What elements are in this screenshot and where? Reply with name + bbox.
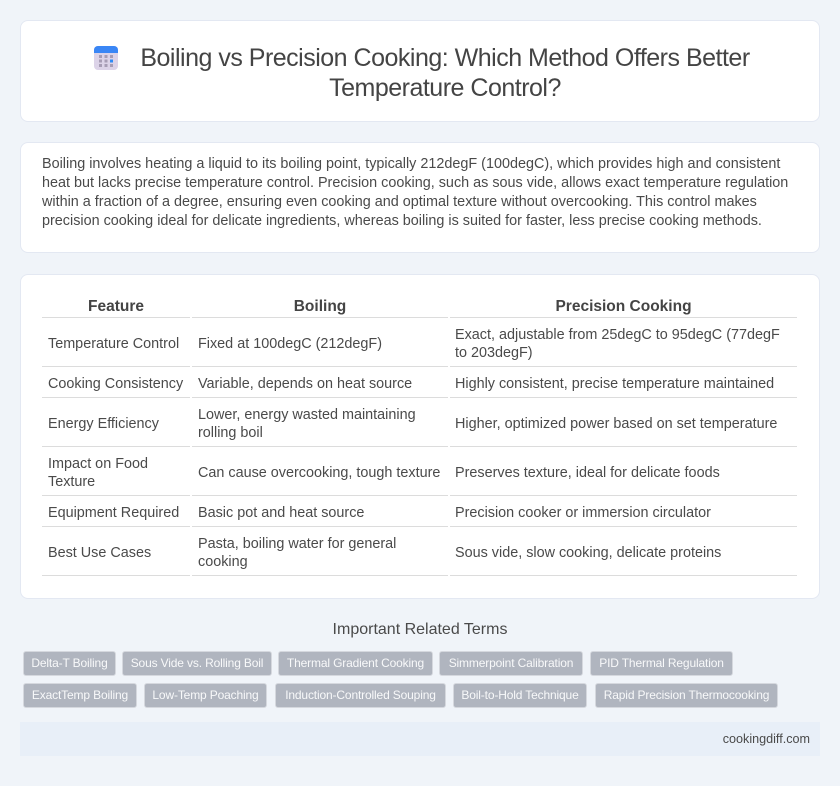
- title: Temperature Control?: [329, 74, 561, 102]
- header: feature: Feature: [88, 298, 144, 315]
- icon: calendar: [94, 46, 118, 70]
- table: comparison: Fixed at 100degC (212degF): [198, 336, 382, 352]
- summary text: precision cooking ideal for delicate ingredients, whereas boiling is suited for faster, less precise cooking methods.: [42, 213, 762, 229]
- tags: related terms: [23, 651, 778, 708]
- table: comparison: cooking: [198, 554, 248, 570]
- table: comparison: Variable, depends on heat source: [198, 376, 412, 392]
- table: comparison: [42, 298, 797, 576]
- row: impact on food texture: [48, 456, 148, 490]
- tags: related terms: ExactTemp Boiling: [32, 688, 128, 702]
- panel: summary: [20, 142, 820, 253]
- table: comparison: Basic pot and heat source: [198, 505, 364, 521]
- tags: related terms: Boil-to-Hold Technique: [461, 688, 579, 702]
- tags: related terms: PID Thermal Regulation: [599, 656, 724, 670]
- tags: related terms: Simmerpoint Calibration: [449, 656, 573, 670]
- table: comparison: Sous vide, slow cooking, delicate proteins: [455, 545, 721, 561]
- table: comparison: Precision cooker or immersion circulator: [455, 505, 711, 521]
- header: boiling: Boiling: [294, 298, 346, 315]
- title: Boiling vs Precision Cooking: Which Method Offers Better: [140, 44, 750, 72]
- row: energy efficiency: Energy Efficiency: [48, 416, 159, 432]
- row: impact on food texture: Impact on Food: [48, 456, 148, 472]
- header: precision cooking: Precision Cooking: [555, 298, 692, 315]
- table: comparison: Pasta, boiling water for general: [198, 536, 396, 552]
- tags: related terms: Rapid Precision Thermocooking: [604, 688, 769, 702]
- table: comparison: Higher, optimized power based on set temperature: [455, 416, 777, 432]
- summary text: heat but lacks precise temperature control. Precision cooking, such as sous vide, allows exact temperature regulation: [42, 175, 788, 191]
- row: impact on food texture: Texture: [48, 474, 95, 490]
- heading: related terms: Important Related Terms: [333, 621, 507, 638]
- tags: related terms: Induction-Controlled Souping: [285, 688, 436, 702]
- footer text: cookingdiff.com: [723, 732, 810, 746]
- table: comparison: rolling boil: [198, 425, 263, 441]
- panel: title card: [20, 20, 820, 122]
- summary text: Boiling involves heating a liquid to its boiling point, typically 212degF (100degC), which provides high and consistent: [42, 156, 780, 172]
- row: equipment required: Equipment Required: [48, 505, 179, 521]
- row: cooking consistency: Cooking Consistency: [48, 376, 183, 392]
- table: comparison: Can cause overcooking, tough texture: [198, 465, 440, 481]
- table: comparison: Highly consistent, precise temperature maintained: [455, 376, 774, 392]
- table: comparison: to 203degF): [455, 345, 533, 361]
- summary text: within a fraction of a degree, ensuring even cooking and optimal texture without overcooking. This control makes: [42, 194, 757, 210]
- row: temperature control: Temperature Control: [48, 336, 179, 352]
- tags: related terms: Sous Vide vs. Rolling Boil: [131, 656, 263, 670]
- tags: related terms: Low-Temp Poaching: [152, 688, 259, 702]
- table: comparison: Lower, energy wasted maintaining: [198, 407, 416, 423]
- footer: [20, 722, 820, 756]
- row: best use cases: Best Use Cases: [48, 545, 151, 561]
- title: [140, 44, 750, 102]
- table: comparison: Exact, adjustable from 25degC to 95degC (77degF: [455, 327, 780, 343]
- summary text: [42, 156, 788, 229]
- tags: related terms: Thermal Gradient Cooking: [287, 656, 424, 670]
- table: comparison: Preserves texture, ideal for delicate foods: [455, 465, 720, 481]
- tags: related terms: Delta-T Boiling: [31, 656, 108, 670]
- panel: comparison table: [20, 274, 820, 599]
